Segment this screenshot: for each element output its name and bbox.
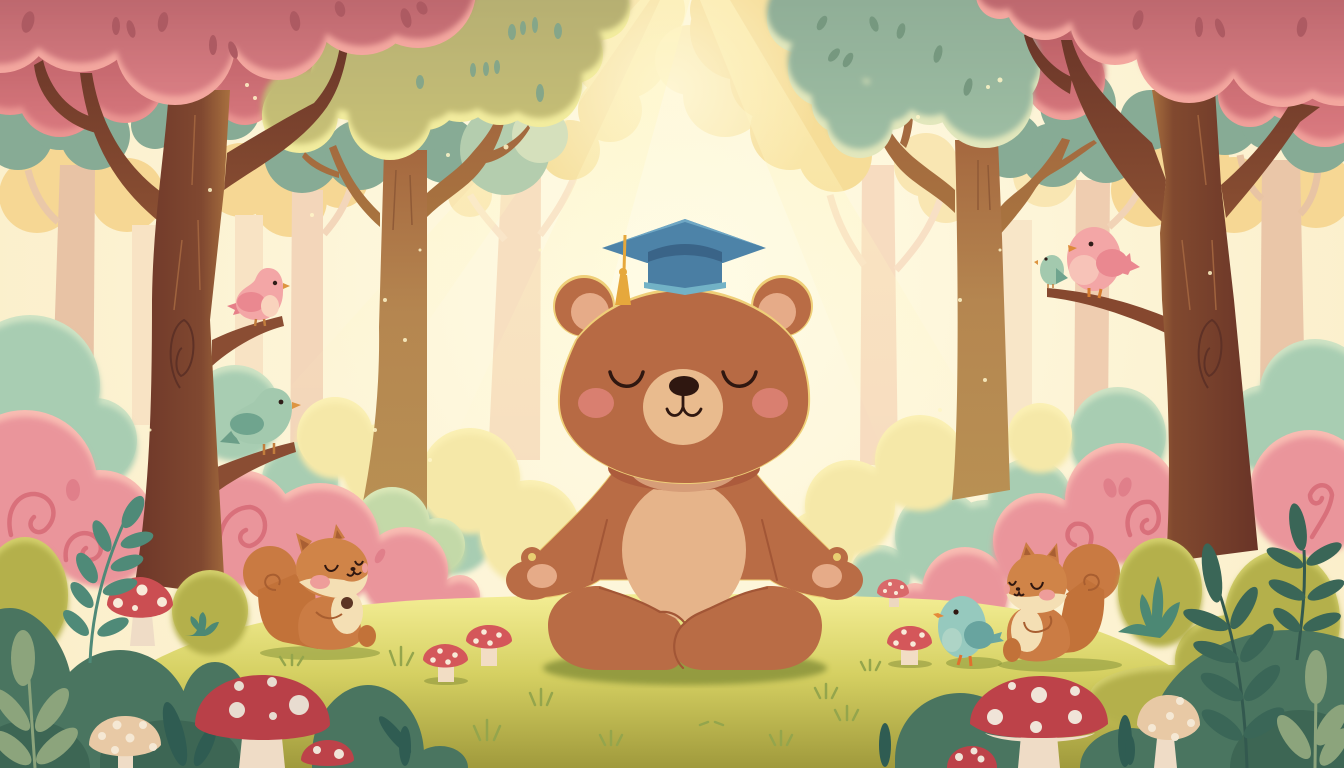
bird: pink on left branch (227, 268, 290, 326)
large red mushroom right (970, 676, 1108, 768)
meadow mushroom 3 (887, 626, 932, 668)
back pink canopy right (938, 0, 1344, 147)
big left tree (34, 38, 349, 595)
bird: teal on left branch (220, 388, 301, 455)
meadow grass tufts (280, 647, 880, 745)
meadow mushroom 2 (466, 625, 512, 666)
near green bushes (354, 487, 465, 577)
background pale trunks (28, 155, 1318, 480)
meadow ground (80, 594, 1230, 768)
right squirrel (998, 542, 1122, 672)
small red mushroom bottom left (301, 740, 354, 766)
under teal canopy (0, 67, 1344, 195)
dark foreground bushes (0, 608, 1344, 768)
small red mushroom left (107, 577, 173, 646)
graduation cap (602, 219, 766, 305)
bear muzzle (643, 369, 723, 445)
bear face (610, 372, 756, 416)
tuft left (185, 612, 219, 636)
tan mushroom right (1137, 695, 1200, 768)
bird: pink on right branch (1067, 227, 1140, 298)
tuft right (1118, 576, 1180, 638)
bear neck band (608, 445, 760, 492)
left dark leaf sprig (59, 492, 155, 663)
floating sparkles (148, 78, 1212, 462)
left squirrel (243, 524, 380, 660)
pink canopy right (976, 0, 1344, 107)
background yellow canopy (0, 125, 1344, 237)
teal bushes (0, 315, 1344, 611)
front teal canopy (767, 0, 1040, 158)
near pink bushes (0, 410, 1344, 640)
meadow mushroom 4 (877, 579, 909, 607)
central light wash (520, 0, 820, 240)
olive moss bushes (0, 537, 1340, 730)
bear belly (622, 480, 746, 620)
pink canopy left (0, 0, 476, 105)
middle yellow canopy (540, 0, 872, 192)
front green canopy (262, 0, 630, 160)
bear cheeks (578, 388, 788, 418)
small red mushroom bottom right (947, 746, 997, 768)
pale foreground leaf sprays (0, 630, 1344, 768)
bear torso and arms (530, 473, 840, 598)
bear legs (548, 586, 822, 670)
yellow bushes (297, 397, 1072, 586)
big right tree (1024, 33, 1320, 562)
large red mushroom left (195, 675, 330, 768)
bear ears (553, 275, 813, 337)
bear head (560, 291, 808, 483)
bear head rim (558, 288, 810, 484)
foreground mushrooms (89, 675, 1200, 768)
bear paws (506, 547, 863, 600)
bear (506, 275, 863, 670)
far bushes (0, 315, 1344, 611)
small teal bird on ground (933, 596, 1004, 669)
tan mushroom left (89, 716, 161, 768)
back pink canopy (0, 0, 410, 137)
right dark leaf sprigs (1181, 502, 1344, 768)
meadow mushroom 1 (423, 644, 468, 685)
light rays (260, 0, 1010, 470)
second right tree (868, 95, 1097, 500)
bear shadow (543, 651, 827, 685)
bird: small teal on right branch (1034, 255, 1068, 288)
second left tree (302, 105, 530, 515)
